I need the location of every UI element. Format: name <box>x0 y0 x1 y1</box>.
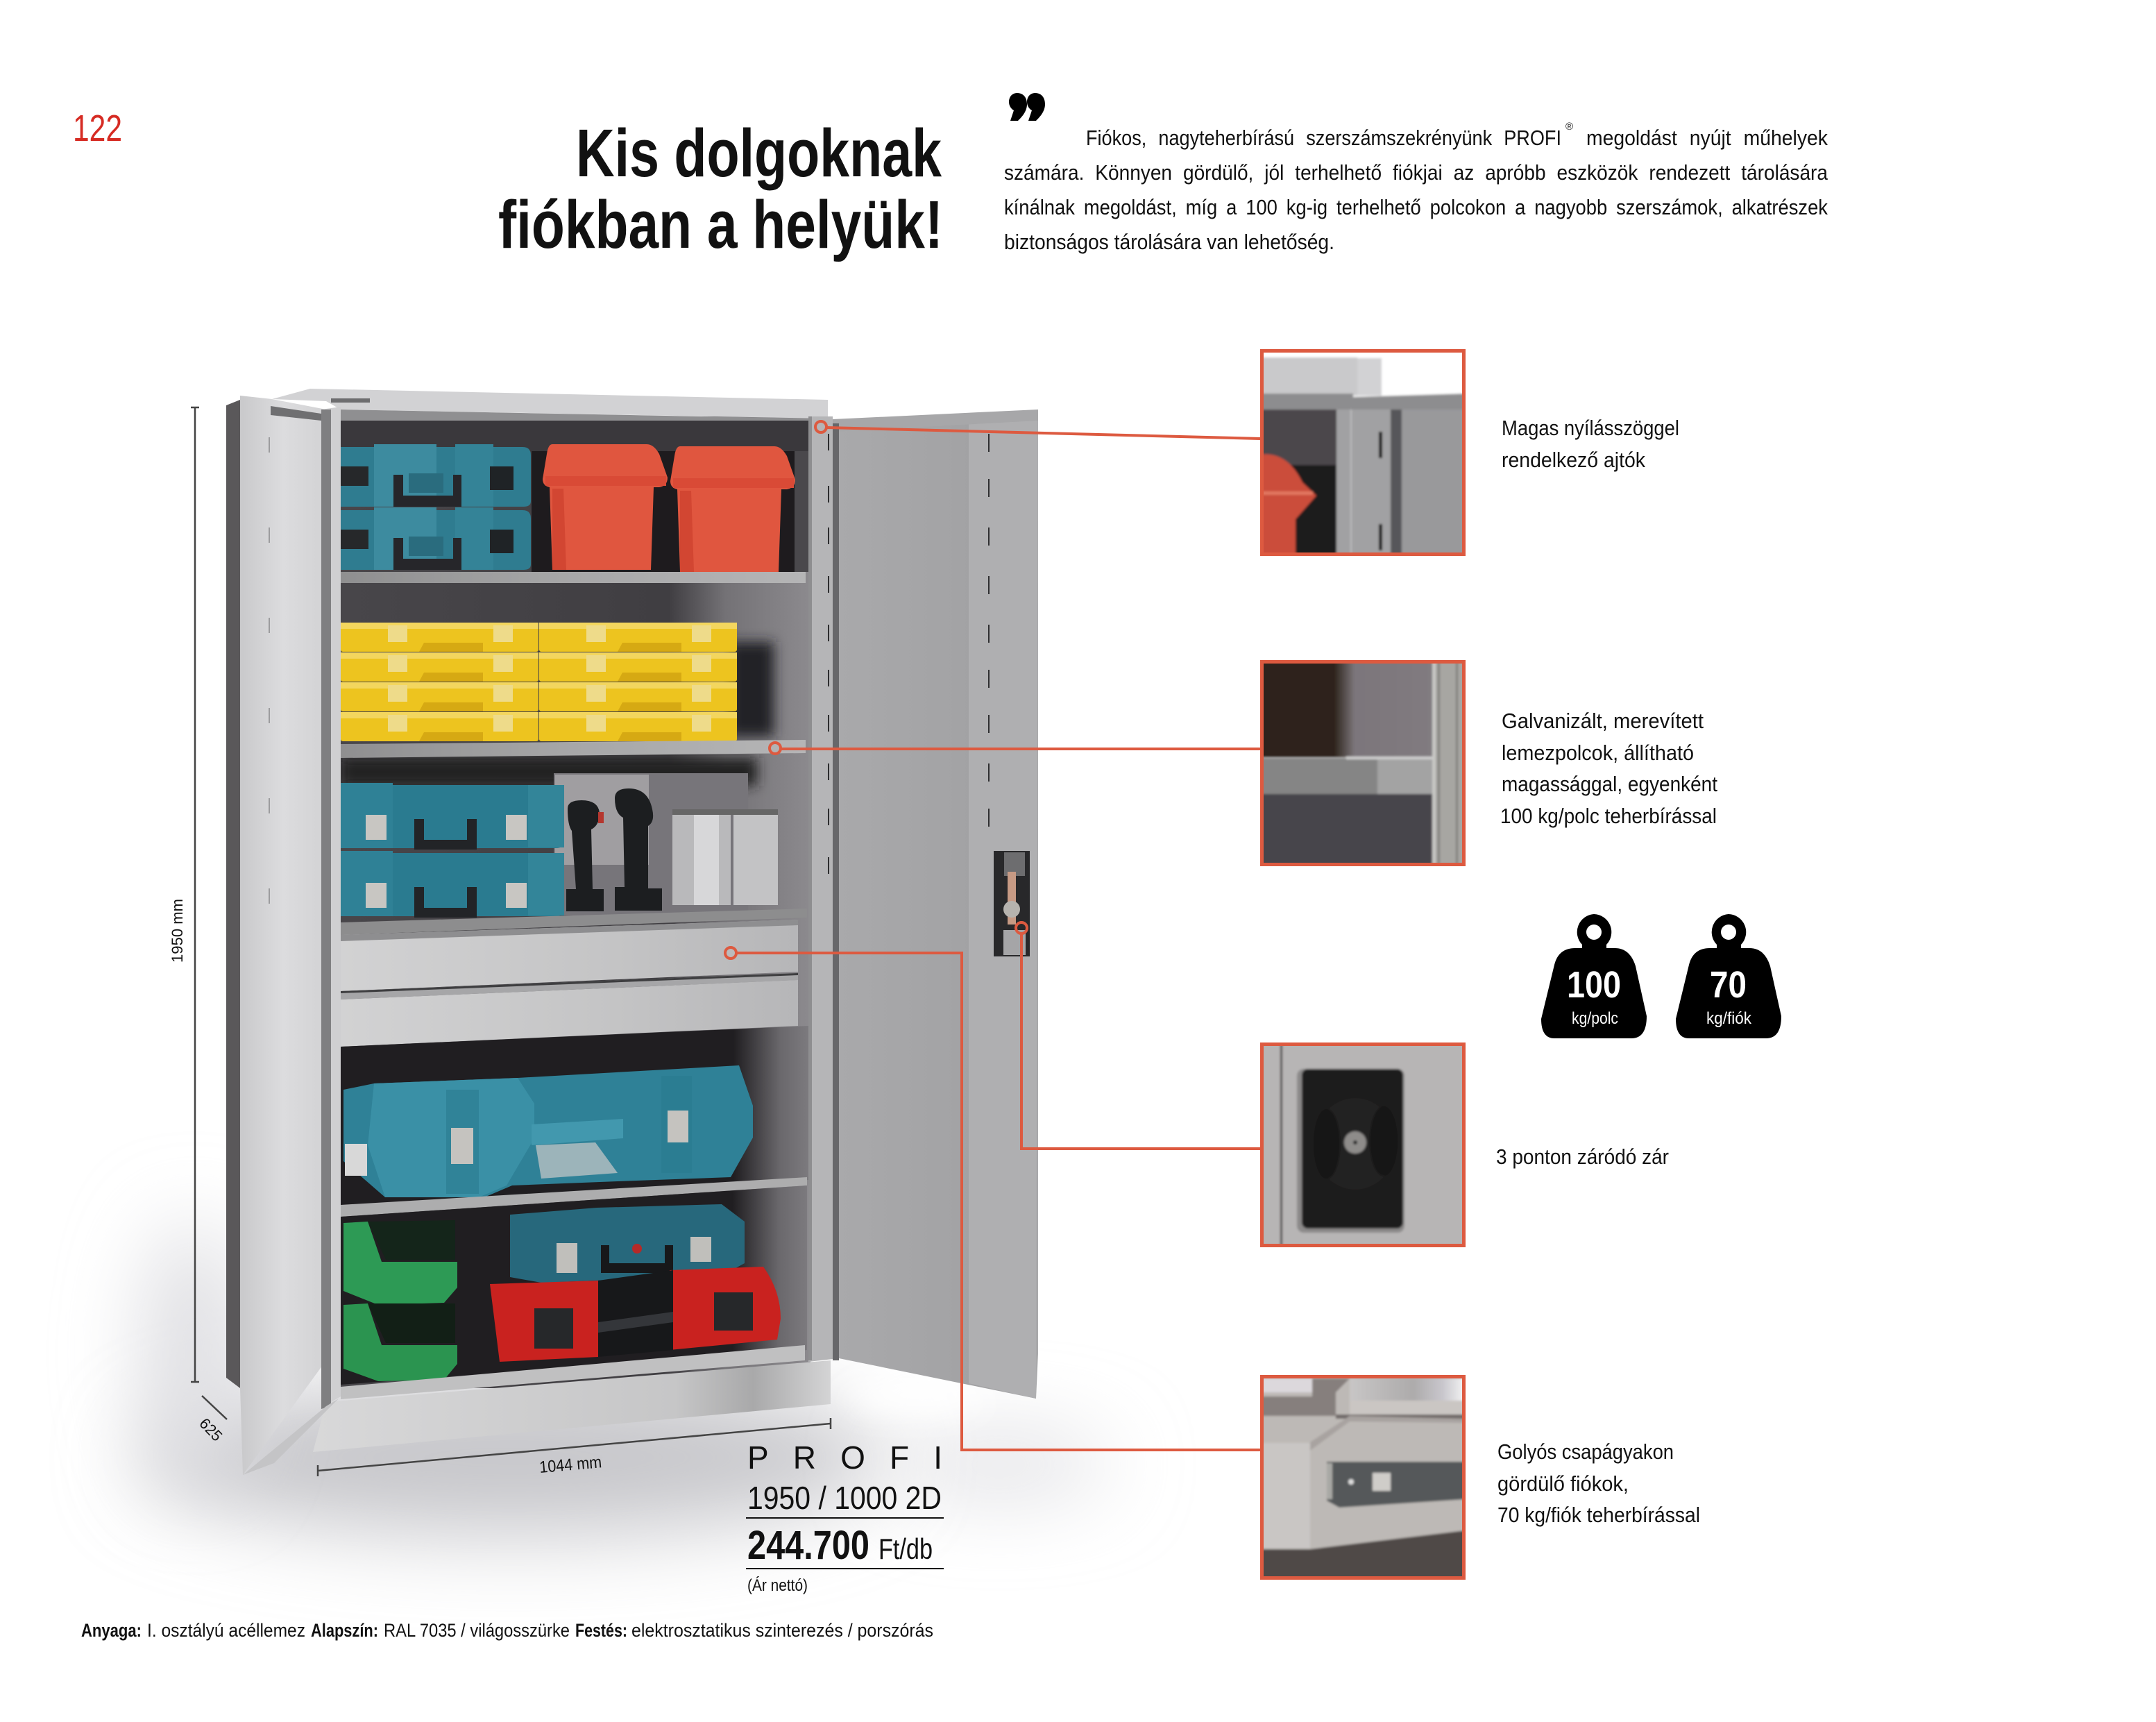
icon: weight 100 kg/polc: kg/polc <box>1572 1009 1618 1028</box>
caption: door: Magas nyílásszöggel <box>1502 416 1679 440</box>
red case <box>490 1267 781 1362</box>
top shelf items <box>341 444 795 572</box>
bottom compartment <box>341 1185 807 1385</box>
caption: drawers: 70 kg/fiók teherbírással <box>1497 1503 1700 1527</box>
materials note <box>81 1620 933 1641</box>
dimension: height: 1950 mm <box>169 899 186 963</box>
aluminium cases <box>672 809 778 905</box>
intro paragraph <box>1004 121 1828 254</box>
plinth <box>313 1360 831 1452</box>
door slots <box>988 434 990 827</box>
caption: drawers <box>1497 1440 1700 1527</box>
materials note: RAL 7035 / világosszürke <box>384 1620 570 1641</box>
callout line 2 <box>781 748 1260 750</box>
caption: lock: 3 ponton záródó zár <box>1496 1145 1669 1169</box>
caption: shelf: lemezpolcok, állítható <box>1502 741 1694 765</box>
icon: weight 100 kg/polc: 100 <box>1567 964 1621 1006</box>
caption: shelf <box>1500 709 1717 828</box>
cabinet interior back wall <box>339 416 810 1388</box>
dimension: depth <box>196 1396 227 1444</box>
shelf 2 <box>341 740 806 758</box>
lower compartment <box>341 1026 808 1208</box>
product name and price <box>746 1440 944 1595</box>
caption: drawers: Golyós csapágyakon <box>1497 1440 1674 1464</box>
callout lines <box>725 421 1260 1450</box>
title: fiókban a helyük! <box>498 187 943 262</box>
product name and price: 244.700 <box>747 1523 869 1568</box>
icon: weight 70 kg/fiók: kg/fiók <box>1706 1009 1752 1028</box>
intro paragraph: megoldást nyújt műhelyek <box>1586 126 1828 150</box>
product name and price: (Ár nettó) <box>747 1576 808 1595</box>
shelf 3 <box>341 909 807 935</box>
top compartment shadows <box>341 421 808 572</box>
caption: shelf: magassággal, egyenként <box>1502 772 1717 796</box>
title <box>498 115 943 262</box>
yellow organisers <box>341 623 737 741</box>
big teal case <box>343 1065 753 1197</box>
left door <box>226 396 341 1475</box>
shelf 1 <box>341 572 806 583</box>
drawers <box>341 920 798 1047</box>
icon: drills <box>566 788 662 911</box>
caption: drawers: gördülő fiókok, <box>1497 1471 1629 1496</box>
shelf 4 <box>341 1177 807 1217</box>
detail photo: lock <box>1260 1043 1466 1247</box>
intro paragraph: számára. Könnyen gördülő, jól terhelhető fiókjai az apróbb eszközök rendezett tárolására <box>1004 160 1828 185</box>
green bins <box>343 1220 457 1381</box>
door lock mechanism <box>994 851 1030 956</box>
yellow box shadow <box>729 642 774 736</box>
bottom compartment items <box>343 1204 781 1381</box>
caption: door: rendelkező ajtók <box>1502 448 1645 472</box>
cabinet illustration <box>226 389 1038 1475</box>
detail photo: door hinge <box>1260 349 1466 556</box>
intro paragraph: kínálnak megoldást, míg a 100 kg-ig terhelhető polcokon a nagyobb szerszámok, alkatrészek <box>1004 195 1828 219</box>
caption: shelf: 100 kg/polc teherbírással <box>1500 804 1717 828</box>
detail photo: shelf <box>1260 660 1466 866</box>
materials note: I. osztályú acéllemez <box>147 1620 305 1641</box>
right door <box>833 410 1038 1399</box>
dimension: width: 1044 mm <box>538 1453 602 1477</box>
detail photo: drawer rail <box>1260 1375 1466 1580</box>
dimension: depth: 625 <box>196 1415 226 1444</box>
product name and price: 1950 / 1000 2D <box>747 1480 942 1516</box>
intro paragraph: Fiókos, nagyteherbírású szerszámszekrényünk PROFI <box>1086 126 1561 150</box>
third shelf items <box>341 773 778 918</box>
dimension: width <box>318 1418 831 1477</box>
product name and price: Ft/db <box>878 1533 933 1565</box>
icon: quotation mark <box>1009 93 1045 121</box>
right frame <box>808 416 833 1362</box>
icon: weight 70 kg/fiók: 70 <box>1710 964 1747 1006</box>
third compartment shadow <box>341 758 757 786</box>
icon: weight 100 kg/polc <box>1541 914 1647 1038</box>
dimension: height <box>169 407 199 1382</box>
product name and price: PROFI <box>747 1440 942 1476</box>
page number: 122 <box>73 108 122 149</box>
floor shadow <box>139 1222 1110 1534</box>
caption: shelf: Galvanizált, merevített <box>1502 709 1704 733</box>
intro paragraph: ® <box>1565 121 1573 133</box>
title: Kis dolgoknak <box>576 115 942 191</box>
caption: door <box>1502 416 1679 472</box>
materials note: Alapszín: <box>311 1620 378 1641</box>
callout line 3 <box>1021 934 1260 1149</box>
marker circles <box>725 421 1027 959</box>
materials note: elektrosztatikus szinterezés / porszórás <box>631 1620 933 1641</box>
materials note: Anyaga: <box>81 1620 142 1641</box>
materials note: Festés: <box>575 1620 627 1641</box>
callout line 4 <box>737 953 1260 1450</box>
intro paragraph: biztonságos tárolására van lehetőség. <box>1004 230 1334 254</box>
callout line 1 <box>826 428 1260 439</box>
icon: weight 70 kg/fiók <box>1676 914 1781 1038</box>
cabinet floor <box>341 1345 805 1399</box>
cabinet top <box>272 389 828 426</box>
lower teal case <box>510 1204 745 1283</box>
